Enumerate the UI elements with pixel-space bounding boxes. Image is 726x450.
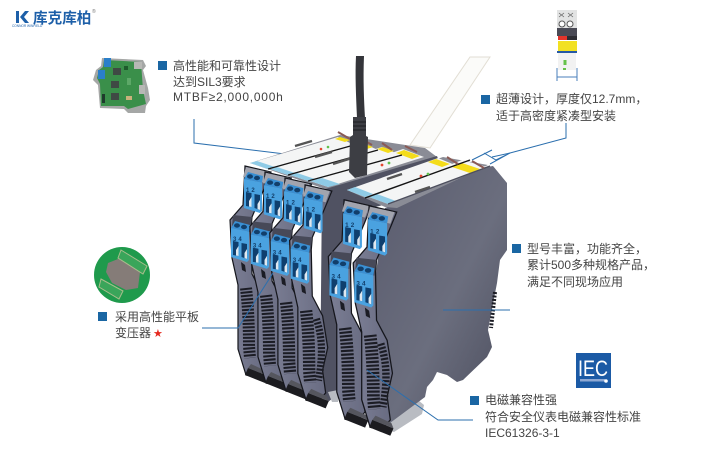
text block: ultra thin: 适于高密度紧凑型安装 bbox=[496, 108, 616, 123]
bullet bbox=[512, 244, 521, 253]
text block: emc: 符合安全仪表电磁兼容性标准 bbox=[485, 409, 641, 424]
cable bbox=[356, 56, 365, 118]
product: din rail modules bbox=[230, 56, 507, 436]
leader line: rich model range bbox=[443, 309, 510, 311]
text block: high performance: 高性能和可靠性设计 bbox=[173, 58, 281, 73]
product: din rail modules: 12 bbox=[266, 194, 277, 200]
icon: slim module top view bbox=[557, 10, 577, 81]
text block: ultra thin: 超薄设计，厚度仅12.7mm， bbox=[496, 91, 647, 106]
icon: logo mark bbox=[16, 11, 29, 23]
product: din rail modules: 34 bbox=[253, 244, 264, 250]
leader line: ultra thin bracket bbox=[492, 123, 566, 157]
bullet bbox=[470, 396, 479, 405]
product: din rail modules: 34 bbox=[356, 280, 368, 287]
right group modules: 12 bbox=[345, 222, 356, 229]
right group modules bbox=[328, 200, 371, 428]
din rail metal bbox=[328, 390, 424, 432]
text block: emc bbox=[470, 392, 641, 440]
text block: planar transformer: 采用高性能平板 bbox=[115, 309, 199, 324]
leader line: planar transformer bbox=[202, 273, 273, 328]
bullet bbox=[481, 95, 490, 104]
text block: high performance: 达到SIL3要求 bbox=[173, 75, 246, 89]
right group modules: 34 bbox=[332, 274, 343, 281]
left group top strips bbox=[250, 132, 424, 187]
text block: high performance bbox=[158, 58, 284, 104]
text block: rich model range bbox=[512, 241, 655, 289]
icon: circuit board bbox=[93, 58, 150, 113]
leader line: ultra thin pointers bbox=[472, 150, 510, 164]
text block: rich model range: 累计500多种规格产品， bbox=[527, 257, 655, 272]
logo small text: CONNOR WINFIELD bbox=[12, 24, 43, 28]
logo wordmark: 库克库柏 bbox=[33, 9, 91, 27]
icon: iec logo bbox=[576, 353, 611, 388]
product: din rail modules: 12 bbox=[370, 228, 381, 235]
registered mark: ® bbox=[92, 8, 96, 15]
light flap bbox=[410, 57, 490, 148]
text block: ultra thin bbox=[481, 91, 647, 123]
left group modules: 34 bbox=[233, 237, 244, 243]
right group top strips bbox=[347, 157, 490, 204]
text block: emc: IEC61326-3-1 bbox=[485, 426, 560, 440]
left group side bbox=[320, 156, 442, 402]
text block: planar transformer bbox=[98, 309, 199, 340]
product: din rail modules: 34 bbox=[273, 249, 284, 256]
text block: rich model range: 满足不同现场应用 bbox=[527, 274, 623, 289]
logo bbox=[12, 8, 96, 28]
leader line: emc bbox=[367, 370, 473, 420]
side vent slits bbox=[491, 292, 495, 328]
left group modules: 12 bbox=[246, 188, 257, 194]
bullet bbox=[158, 61, 167, 70]
bullet bbox=[98, 312, 107, 321]
product: din rail modules: 12 bbox=[306, 207, 317, 214]
text block: emc: 电磁兼容性强 bbox=[485, 392, 557, 407]
right group top bbox=[347, 157, 488, 208]
product: din rail modules: 34 bbox=[293, 257, 304, 264]
icon: planar transformer bbox=[94, 247, 150, 303]
connector bbox=[349, 117, 368, 178]
left group top bbox=[250, 135, 437, 190]
icon: iec logo: IEC bbox=[578, 356, 608, 381]
right group side panel bbox=[375, 166, 507, 423]
text block: high performance: MTBF≥2,000,000h bbox=[173, 90, 284, 104]
text block: planar transformer: 变压器 bbox=[115, 325, 151, 340]
leader line: high performance bbox=[194, 119, 318, 158]
product: din rail modules: 12 bbox=[286, 199, 297, 206]
left group modules bbox=[230, 166, 271, 383]
text block: rich model range: 型号丰富，功能齐全， bbox=[527, 241, 647, 256]
star: ★ bbox=[153, 327, 163, 340]
